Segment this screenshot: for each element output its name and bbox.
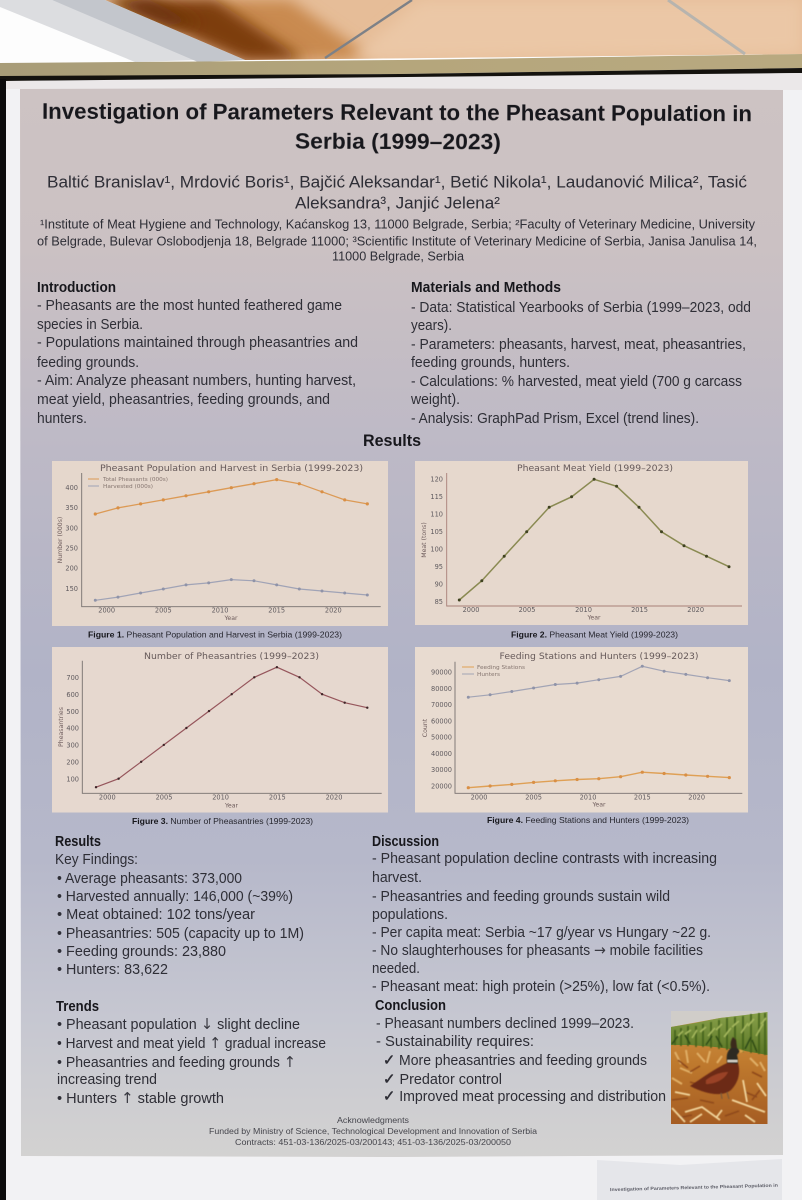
panel: materials and methods: years). xyxy=(411,318,452,334)
panel: results key findings: • Average pheasants: 373,000 xyxy=(57,871,242,887)
chart: figure 3 pheasantries: 100 xyxy=(66,775,79,783)
panel: discussion: - Pheasantries and feeding grounds sustain wild xyxy=(372,889,670,905)
panel: discussion: harvest. xyxy=(372,870,422,886)
affiliations: ¹Institute of Meat Hygiene and Technology, Kaćanskog 13, 11000 Belgrade, Serbia; ²Faculty of Veterinary Medicine, University xyxy=(40,216,755,232)
panel: trends: • Pheasant population ↓ slight decline xyxy=(57,1015,300,1033)
chart: figure 1 population and harvest xyxy=(52,461,388,626)
panel: trends xyxy=(56,999,326,1107)
chart: figure 1 population and harvest: Harvested (000s) xyxy=(103,484,153,490)
panel: introduction: - Pheasants are the most hunted feathered game xyxy=(37,298,342,314)
chart: figure 4 feeding stations and hunters: Year xyxy=(591,802,606,808)
panel: introduction: - Aim: Analyze pheasant numbers, hunting harvest, xyxy=(37,373,356,389)
chart: figure 3 pheasantries: 500 xyxy=(66,708,79,716)
panel: materials and methods: weight). xyxy=(410,392,460,408)
chart: figure 4 feeding stations and hunters: Hunters xyxy=(477,672,500,678)
panel: materials and methods: Materials and Methods xyxy=(411,280,561,296)
chart: figure 4 feeding stations and hunters: 80000 xyxy=(431,685,452,693)
chart: figure 2 meat yield: 110 xyxy=(430,510,443,518)
affiliations: of Belgrade, Bulevar Oslobodjenja 18, Belgrade 11000; ³Scientific Institute of Veterinary Medicine of Serbia, Janisa Janulisa 14, xyxy=(37,234,757,248)
chart: figure 3 pheasantries: 600 xyxy=(66,691,79,699)
chart: figure 2 meat yield: Year xyxy=(586,614,601,622)
chart: figure 4 feeding stations and hunters: 90000 xyxy=(431,668,452,676)
left dark edge xyxy=(0,79,6,1200)
panel: results key findings: • Harvested annually: 146,000 (~39%) xyxy=(57,889,293,905)
chart: figure 2 meat yield: 105 xyxy=(430,528,443,536)
chart: figure 3 pheasantries: 2005 xyxy=(156,794,172,802)
chart: figure 2 meat yield: 100 xyxy=(430,546,443,554)
panel: results key findings: Key Findings: xyxy=(55,852,138,868)
chart: figure 3 pheasantries: Pheasantries xyxy=(58,707,65,747)
icon: pheasant in a cornfield photo xyxy=(671,1011,768,1124)
panel: materials and methods: feeding grounds, hunters. xyxy=(411,355,570,371)
chart: figure 2 meat yield: 2015 xyxy=(631,606,648,614)
heading: results: Results xyxy=(363,432,421,450)
chart: figure 2 meat yield: 85 xyxy=(435,598,443,606)
chart: figure 2 meat yield: 95 xyxy=(435,563,443,571)
chart: figure 1 population and harvest: 200 xyxy=(65,564,78,572)
chart: figure 2 meat yield: 120 xyxy=(430,476,443,484)
chart: figure 3 pheasantries: 2015 xyxy=(269,794,286,802)
chart: figure 3 pheasantries: Number of Pheasantries (1999–2023) xyxy=(144,651,319,662)
panel: discussion: - No slaughterhouses for pheasants → mobile facilities xyxy=(372,941,703,959)
panel: introduction xyxy=(37,280,358,427)
panel: conclusion: Conclusion xyxy=(375,998,446,1014)
chart: figure 4 feeding stations and hunters: 2000 xyxy=(471,794,487,802)
chart: figure 2 meat yield: 115 xyxy=(430,493,443,501)
panel: introduction: species in Serbia. xyxy=(37,317,143,333)
poster frame rail xyxy=(0,54,802,81)
panel: introduction: meat yield, pheasantries, feeding grounds, and xyxy=(37,392,330,408)
chart: figure 4 feeding stations and hunters: Feeding Stations xyxy=(477,665,525,671)
chart: figure 4 feeding stations and hunters: 2020 xyxy=(688,794,705,802)
chart: figure 3 pheasantries: Year xyxy=(224,802,238,810)
authors: Aleksandra³, Janjić Jelena² xyxy=(295,194,501,212)
background: ceiling beam and wood panel xyxy=(0,0,802,64)
chart: figure 2 meat yield: 2000 xyxy=(463,606,479,614)
chart: figure 3 pheasantries: 700 xyxy=(66,674,79,682)
authors: Baltić Branislav¹, Mrdović Boris¹, Bajčić Aleksandar¹, Betić Nikola¹, Laudanović Milica², Tasić xyxy=(47,174,747,192)
panel: conclusion: ✓ Improved meat processing and distribution xyxy=(383,1087,666,1105)
chart: figure 2 meat yield: Meat (tons) xyxy=(421,522,428,558)
board strip above poster xyxy=(6,73,802,90)
chart: figure 4 feeding stations and hunters: Feeding Stations and Hunters (1999–2023) xyxy=(500,651,698,662)
chart: figure 1 population and harvest: 2015 xyxy=(268,606,285,614)
chart: figure 2 meat yield xyxy=(415,461,748,625)
title xyxy=(42,99,752,155)
panel: conclusion: ✓ More pheasantries and feeding grounds xyxy=(383,1051,647,1069)
chart: figure 2 meat yield: 90 xyxy=(435,580,443,588)
authors xyxy=(47,174,747,212)
panel: results key findings: • Pheasantries: 505 (capacity up to 1M) xyxy=(57,926,304,942)
panel: results key findings: • Meat obtained: 102 tons/year xyxy=(57,907,255,923)
panel: trends: increasing trend xyxy=(57,1072,157,1088)
title: Investigation of Parameters Relevant to the Pheasant Population in xyxy=(42,99,752,126)
panel: materials and methods: - Data: Statistical Yearbooks of Serbia (1999–2023, odd xyxy=(411,300,751,316)
affiliations xyxy=(37,216,757,264)
corn stalks xyxy=(672,1013,766,1055)
chart: figure 1 population and harvest: 2010 xyxy=(212,606,228,614)
panel: discussion: - Pheasant population decline contrasts with increasing xyxy=(372,851,717,867)
panel: materials and methods xyxy=(410,280,751,427)
chart: figure 3 pheasantries: 2010 xyxy=(212,794,229,802)
chart: figure 1 population and harvest: 250 xyxy=(65,544,78,552)
chart: figure 4 feeding stations and hunters: 50000 xyxy=(431,734,452,742)
panel: conclusion: ✓ Predator control xyxy=(383,1070,502,1088)
panel: introduction: - Populations maintained through pheasantries and xyxy=(37,335,358,351)
panel: introduction: hunters. xyxy=(37,411,87,427)
panel: discussion: - Per capita meat: Serbia ~17 g/year vs Hungary ~22 g. xyxy=(372,925,711,941)
panel: conclusion: - Pheasant numbers declined 1999–2023. xyxy=(376,1016,634,1032)
chart: figure 4 feeding stations and hunters: 2010 xyxy=(580,794,596,802)
caption: figure 2: Figure 2. Pheasant Meat Yield (1999-2023) xyxy=(511,630,678,640)
panel: materials and methods: - Analysis: GraphPad Prism, Excel (trend lines). xyxy=(411,411,699,427)
chart: figure 1 population and harvest: 2000 xyxy=(98,606,115,614)
chart: figure 3 pheasantries: 2020 xyxy=(326,794,342,802)
chart: figure 3 pheasantries: 300 xyxy=(66,742,79,750)
panel: discussion: - Pheasant meat: high protein (>25%), low fat (<0.5%). xyxy=(372,979,710,995)
chart: figure 1 population and harvest: Year xyxy=(223,615,238,622)
chart: figure 2 meat yield: 2010 xyxy=(575,606,592,614)
chart: figure 1 population and harvest: 2020 xyxy=(325,606,342,614)
acknowledgments: Funded by Ministry of Science, Technological Development and Innovation of Serbia xyxy=(209,1126,537,1136)
caption: figure 1: Figure 1. Pheasant Population and Harvest in Serbia (1999-2023) xyxy=(88,630,342,640)
chart: figure 3 pheasantries: 2000 xyxy=(99,794,116,802)
chart: figure 4 feeding stations and hunters: 40000 xyxy=(431,750,452,758)
panel: discussion: needed. xyxy=(372,961,420,977)
chart: figure 4 feeding stations and hunters: 2015 xyxy=(634,794,651,802)
panel: results key findings: Results xyxy=(55,834,101,850)
panel: results key findings xyxy=(55,834,304,978)
chart: figure 4 feeding stations and hunters: Count xyxy=(422,718,429,737)
chart: figure 1 population and harvest: 350 xyxy=(65,504,78,512)
chart: figure 1 population and harvest: Total Pheasants (000s) xyxy=(102,477,168,483)
panel: results key findings: • Hunters: 83,622 xyxy=(57,962,168,978)
chart: figure 4 feeding stations and hunters: 20000 xyxy=(431,782,452,790)
panel: introduction: feeding grounds. xyxy=(37,355,139,371)
panel: trends: Trends xyxy=(56,999,99,1015)
chart: figure 3 pheasantries xyxy=(52,647,388,812)
caption: figure 3: Figure 3. Number of Pheasantries (1999-2023) xyxy=(132,816,313,826)
small printed copy of the poster at bottom right: Investigation of Parameters Relevant to the Pheasant Population in xyxy=(610,1183,778,1192)
panel: trends: • Hunters ↑ stable growth xyxy=(57,1089,224,1107)
chart: figure 2 meat yield: 2020 xyxy=(687,606,704,614)
chart: figure 2 meat yield: Pheasant Meat Yield (1999–2023) xyxy=(517,463,673,474)
chart: figure 1 population and harvest: 400 xyxy=(65,484,78,492)
panel: introduction: Introduction xyxy=(37,280,116,296)
acknowledgments xyxy=(209,1115,537,1147)
panel: discussion: Discussion xyxy=(372,834,439,850)
chart: figure 3 pheasantries: 200 xyxy=(66,758,79,766)
panel: trends: • Harvest and meat yield ↑ gradual increase xyxy=(57,1034,326,1052)
chart: figure 2 meat yield: 2005 xyxy=(519,606,535,614)
chart: figure 4 feeding stations and hunters: 60000 xyxy=(431,717,452,725)
panel: materials and methods: - Parameters: pheasants, harvest, meat, pheasantries, xyxy=(411,337,746,353)
small printed copy of the poster at bottom right xyxy=(597,1159,782,1200)
chart: figure 3 pheasantries: 400 xyxy=(66,725,79,733)
caption: figure 4: Figure 4. Feeding Stations and Hunters (1999-2023) xyxy=(487,815,689,825)
chart: figure 1 population and harvest: Pheasant Population and Harvest in Serbia (1999-2023) xyxy=(100,463,363,474)
panel: trends: • Pheasantries and feeding grounds ↑ xyxy=(57,1053,296,1071)
chart: figure 1 population and harvest: 150 xyxy=(65,585,78,593)
chart: figure 4 feeding stations and hunters: 30000 xyxy=(431,766,452,774)
panel: materials and methods: - Calculations: % harvested, meat yield (700 g carcass xyxy=(411,374,742,390)
panel: conclusion xyxy=(375,998,666,1105)
acknowledgments: Acknowledgments xyxy=(337,1115,409,1125)
panel: discussion xyxy=(372,834,717,995)
pheasant body xyxy=(690,1037,745,1099)
affiliations: 11000 Belgrade, Serbia xyxy=(332,248,465,264)
stubble xyxy=(672,1050,766,1122)
chart: figure 4 feeding stations and hunters: 70000 xyxy=(431,701,452,709)
title: Serbia (1999–2023) xyxy=(295,129,501,154)
panel: results key findings: • Feeding grounds: 23,880 xyxy=(57,944,226,960)
panel: conclusion: - Sustainability requires: xyxy=(376,1034,534,1050)
acknowledgments: Contracts: 451-03-136/2025-03/200143; 451-03-136/2025-03/200050 xyxy=(235,1137,511,1147)
chart: figure 1 population and harvest: Number (000s) xyxy=(57,517,64,563)
panel: discussion: populations. xyxy=(372,907,448,923)
chart: figure 1 population and harvest: 300 xyxy=(65,524,78,532)
chart: figure 4 feeding stations and hunters xyxy=(415,647,748,812)
chart: figure 1 population and harvest: 2005 xyxy=(155,606,172,614)
chart: figure 4 feeding stations and hunters: 2005 xyxy=(525,794,542,802)
